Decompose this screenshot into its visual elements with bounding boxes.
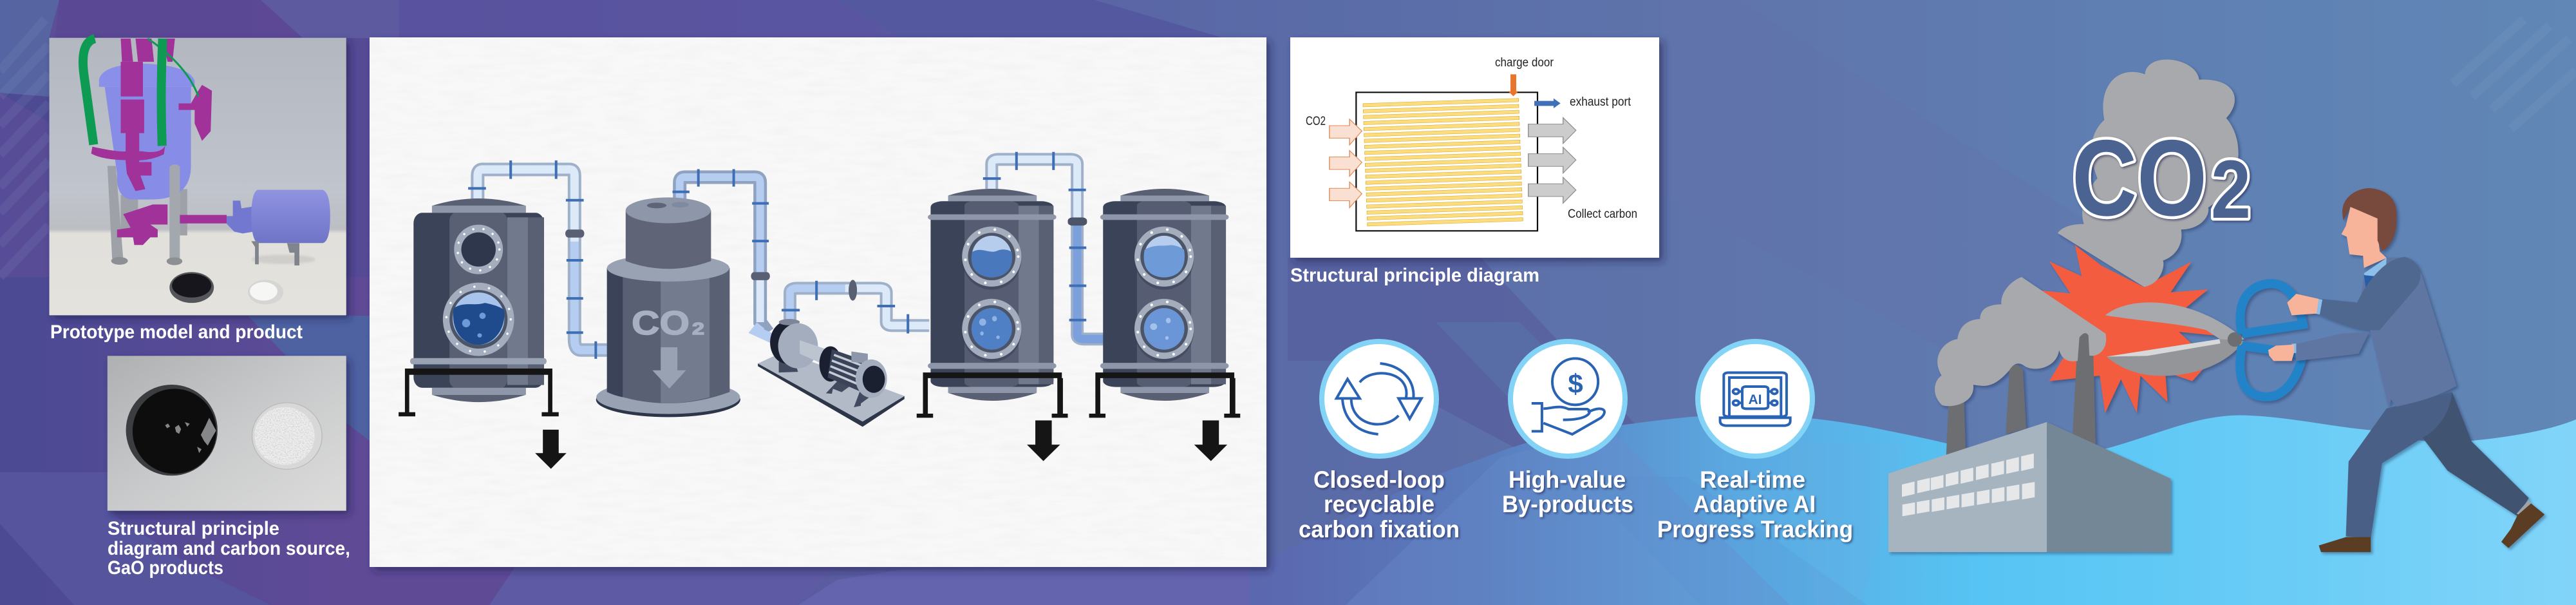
white GaO dish [252, 403, 322, 469]
diagram labels: exhaust port [1570, 95, 1631, 109]
lower fittings [117, 204, 167, 245]
magenta piping [121, 62, 151, 191]
CO2 inlet arrows [1330, 119, 1362, 207]
tank 3 [917, 189, 1067, 418]
caption: prototype model: Prototype model and product [50, 322, 303, 343]
factory windows [1902, 454, 2035, 516]
panel: structural principle diagram [1290, 37, 1659, 258]
decorative stripes left and right [0, 19, 2576, 277]
lower smoke cloud [1935, 277, 2106, 406]
title: CO2: 2 [2211, 144, 2251, 236]
black petri dish [169, 272, 214, 303]
label: CO2 on column: 2 [692, 319, 704, 338]
label: high value by-products: By-products [1502, 491, 1633, 517]
green tubes [83, 39, 95, 145]
caption: structural principle diagram: Structural principle diagram [1290, 265, 1539, 286]
pipe 3 [782, 280, 929, 333]
factory building [1888, 422, 2047, 552]
label: CO2 on column: CO [632, 305, 690, 342]
diagram labels: charge door [1495, 56, 1554, 70]
pipe 4 [983, 152, 1104, 339]
rear legs [108, 166, 187, 258]
shirt and tie [2364, 258, 2387, 297]
shadow on the table [251, 254, 315, 264]
label: high value by-products [1502, 466, 1633, 517]
pump motor [227, 200, 254, 233]
businessman [2268, 188, 2544, 552]
tank 4 [1089, 189, 1240, 418]
charge door arrow [1508, 74, 1519, 96]
reactor box [1356, 92, 1537, 231]
caption: carbon source [108, 518, 350, 579]
label: AI progress tracking [1657, 466, 1853, 543]
label: CO2 on column [632, 305, 704, 342]
label: closed loop: recyclable [1324, 491, 1434, 517]
diagram labels [1306, 56, 1637, 221]
hair [2342, 188, 2397, 251]
arrow: tank 3 discharge [1027, 421, 1060, 461]
carbon outlet arrows [1528, 118, 1576, 203]
explosion burst [2041, 245, 2215, 413]
pipe 2 [673, 169, 770, 332]
pipe 2 end [756, 325, 773, 339]
icon: AI laptop [1695, 339, 1815, 459]
label: AI progress tracking: Real-time [1700, 466, 1805, 493]
face [2342, 207, 2387, 268]
icon: high value by-products: $ [1568, 369, 1583, 399]
diagram labels: Collect carbon [1568, 207, 1637, 221]
tank 1 [399, 198, 559, 416]
panel: prototype model photo [50, 38, 346, 315]
process flow right part [756, 152, 1240, 461]
arrow: tank 1 discharge [535, 430, 567, 469]
icon: closed loop [1319, 339, 1439, 459]
rear leg [2423, 392, 2529, 516]
label: AI progress tracking: Adaptive AI [1693, 491, 1816, 517]
label: closed loop [1299, 466, 1460, 543]
label: high value by-products: High-value [1509, 466, 1626, 493]
front legs [169, 164, 180, 258]
caption: carbon source: diagram and carbon source, [108, 538, 350, 559]
rear arm and hand [2294, 332, 2369, 361]
pipe 1 [468, 160, 607, 359]
chimneys [1946, 332, 2096, 456]
front arm and hand [2319, 257, 2420, 331]
icon: AI laptop: AI [1749, 392, 1762, 407]
illustration: cutting CO2 emissions [1888, 59, 2544, 552]
white petri dish [248, 280, 283, 305]
icon: high value by-products [1508, 339, 1628, 459]
carbon filament strips [1363, 99, 1523, 226]
label: closed loop: Closed-loop [1313, 466, 1445, 493]
black carbon dish [126, 385, 218, 475]
jacket [2360, 258, 2456, 408]
tank [105, 87, 191, 200]
panel: carbon source photo [108, 356, 346, 511]
pump [758, 319, 905, 427]
process flow left part [399, 160, 770, 469]
title: CO2: CO [2072, 117, 2207, 238]
arrow: tank 4 discharge [1194, 421, 1227, 461]
label: closed loop: carbon fixation [1299, 516, 1460, 543]
label: AI progress tracking: Progress Tracking [1657, 516, 1853, 543]
front leg [2346, 392, 2452, 538]
exhaust arrow [1534, 99, 1561, 108]
caption: carbon source: GaO products [108, 557, 223, 579]
caption: carbon source: Structural principle [108, 518, 279, 539]
shears handles [2241, 283, 2303, 334]
wave [1249, 414, 2576, 605]
upper smoke cloud [2058, 59, 2239, 287]
shears blades [2105, 302, 2244, 345]
CO2 column tank [596, 197, 740, 417]
panel: process flow paper [370, 37, 1266, 567]
diagram labels: CO2 [1306, 115, 1326, 128]
